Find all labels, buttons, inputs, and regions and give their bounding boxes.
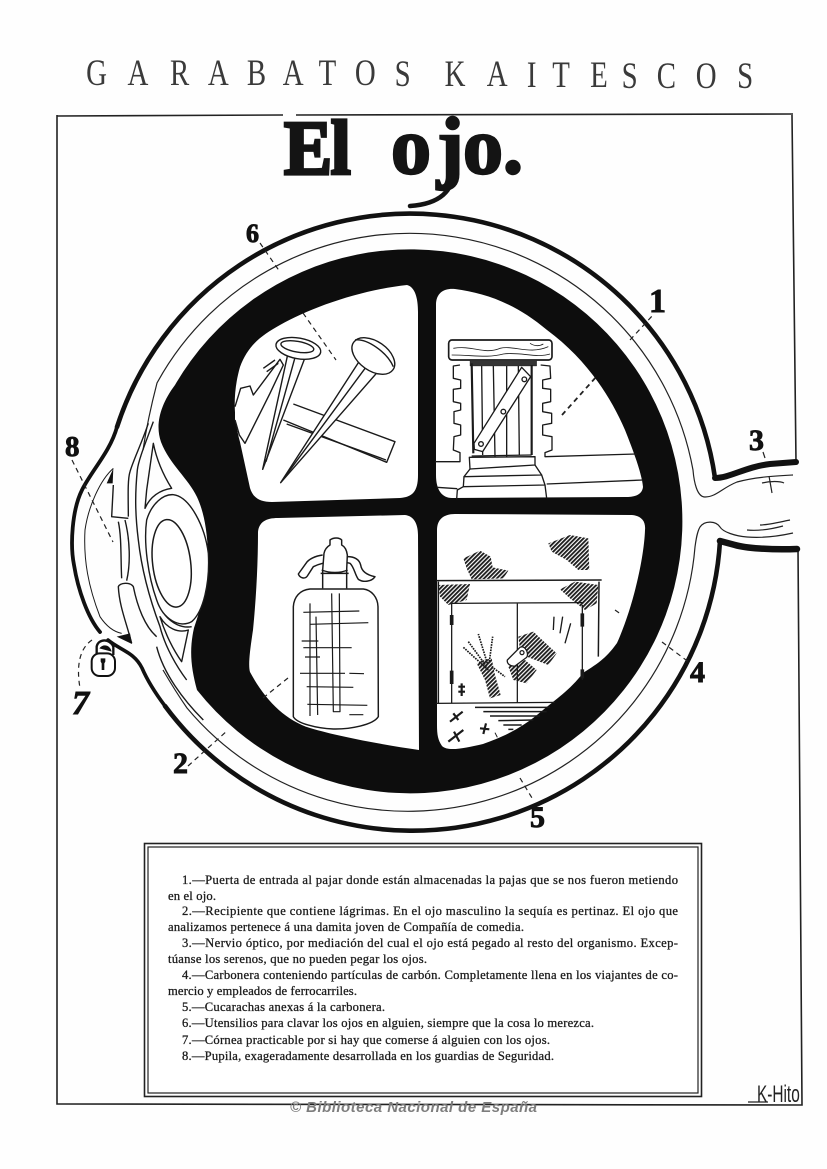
lens ligaments — [145, 443, 172, 508]
pupil membrane — [118, 520, 129, 581]
callout numbers: 7 — [72, 685, 91, 722]
frame of the cellar — [436, 580, 602, 703]
floor shadow — [475, 707, 550, 729]
cockroaches — [448, 683, 497, 742]
crenellated jambs — [435, 365, 461, 462]
title: El ojo: El — [284, 106, 351, 192]
stone steps — [457, 457, 547, 499]
panel: coal cellar (bottom right) — [436, 514, 645, 749]
door planks — [472, 363, 532, 457]
outer eye outline with cornea and optic nerve — [72, 214, 797, 831]
cylinder mark — [507, 647, 527, 666]
aqueous chamber line — [85, 468, 122, 633]
black sclera — [159, 249, 682, 793]
legend text — [168, 873, 678, 1063]
header: Garabatos Kaitescos: GARABATOS KAITESCOS — [0, 53, 753, 97]
legend text: 4.—Carbonera conteniendo partículas de carbón. Completamente llena en los viajantes de co- — [182, 968, 678, 982]
panel: nails and hammer (top left) — [235, 285, 418, 502]
iris upper — [112, 485, 128, 518]
long inner lines — [136, 422, 187, 680]
callout numbers: 5 — [530, 801, 545, 834]
callout numbers — [65, 219, 764, 834]
leader lines — [72, 243, 690, 798]
iris lower — [118, 583, 157, 643]
legend text: analizamos pertenece á una damita joven de Compañía de comedia. — [168, 920, 524, 934]
panel: soda siphon (bottom left) — [249, 515, 419, 750]
lens, iris and cornea — [85, 422, 209, 720]
crystalline lens — [146, 495, 209, 624]
legend text: 7.—Córnea practicable por si hay que comerse á alguien con los ojos. — [182, 1033, 550, 1047]
signature: K-Hito — [757, 1082, 800, 1108]
wooden lintel — [449, 340, 552, 366]
legend text: en el ojo. — [168, 889, 216, 903]
nail right — [281, 330, 401, 483]
callout numbers: 6 — [246, 219, 259, 248]
title: El ojo — [284, 103, 523, 206]
legend text: 6.—Utensilios para clavar los ojos en alguien, siempre que la cosa lo merezca. — [182, 1016, 594, 1030]
nail left — [263, 334, 322, 469]
soot blobs — [438, 535, 598, 698]
callout numbers: 2 — [173, 747, 188, 780]
legend text: túanse los serenos, que no pueden pegar los ojos. — [168, 952, 427, 966]
inner ring line — [143, 233, 793, 811]
siphon body — [293, 589, 378, 729]
title: El ojo: ojo. — [391, 103, 523, 191]
legend text: 3.—Nervio óptico, por mediación del cual el ojo está pegado al resto del organismo. Excep- — [182, 936, 678, 950]
callout numbers: 1 — [649, 283, 666, 320]
hammer handle — [283, 404, 395, 462]
icon: padlock on the cornea — [92, 640, 115, 676]
diagonal brace — [474, 367, 531, 452]
optic nerve details — [747, 452, 790, 530]
panel: legend box — [144, 844, 702, 1096]
legend text: 1.—Puerta de entrada al pajar donde están almacenadas la pajas que se nos fueron metiendo — [182, 873, 678, 887]
siphon head — [298, 538, 375, 588]
hammer head — [235, 359, 283, 443]
legend text: 5.—Cucarachas anexas á la carbonera. — [182, 1000, 385, 1014]
callout numbers: 8 — [65, 431, 80, 463]
legend text: 8.—Pupila, exageradamente desarrollada en los guardias de Seguridad. — [182, 1049, 554, 1063]
callout numbers: 3 — [749, 424, 764, 457]
eye diagram — [65, 214, 797, 834]
legend text: 2.—Recipiente que contiene lágrimas. En el ojo masculino la sequía es pertinaz. El ojo que — [182, 904, 678, 918]
page frame — [57, 114, 802, 1105]
watermark: © Biblioteca Nacional de España — [290, 1099, 537, 1116]
hand on the wall — [463, 634, 505, 677]
callout numbers: 4 — [690, 656, 705, 689]
small sparks — [553, 617, 571, 643]
panel: door and column (top right) — [435, 289, 643, 499]
grid of lines — [300, 593, 368, 716]
legend text: mercio y empleados de ferrocarriles. — [168, 984, 357, 998]
